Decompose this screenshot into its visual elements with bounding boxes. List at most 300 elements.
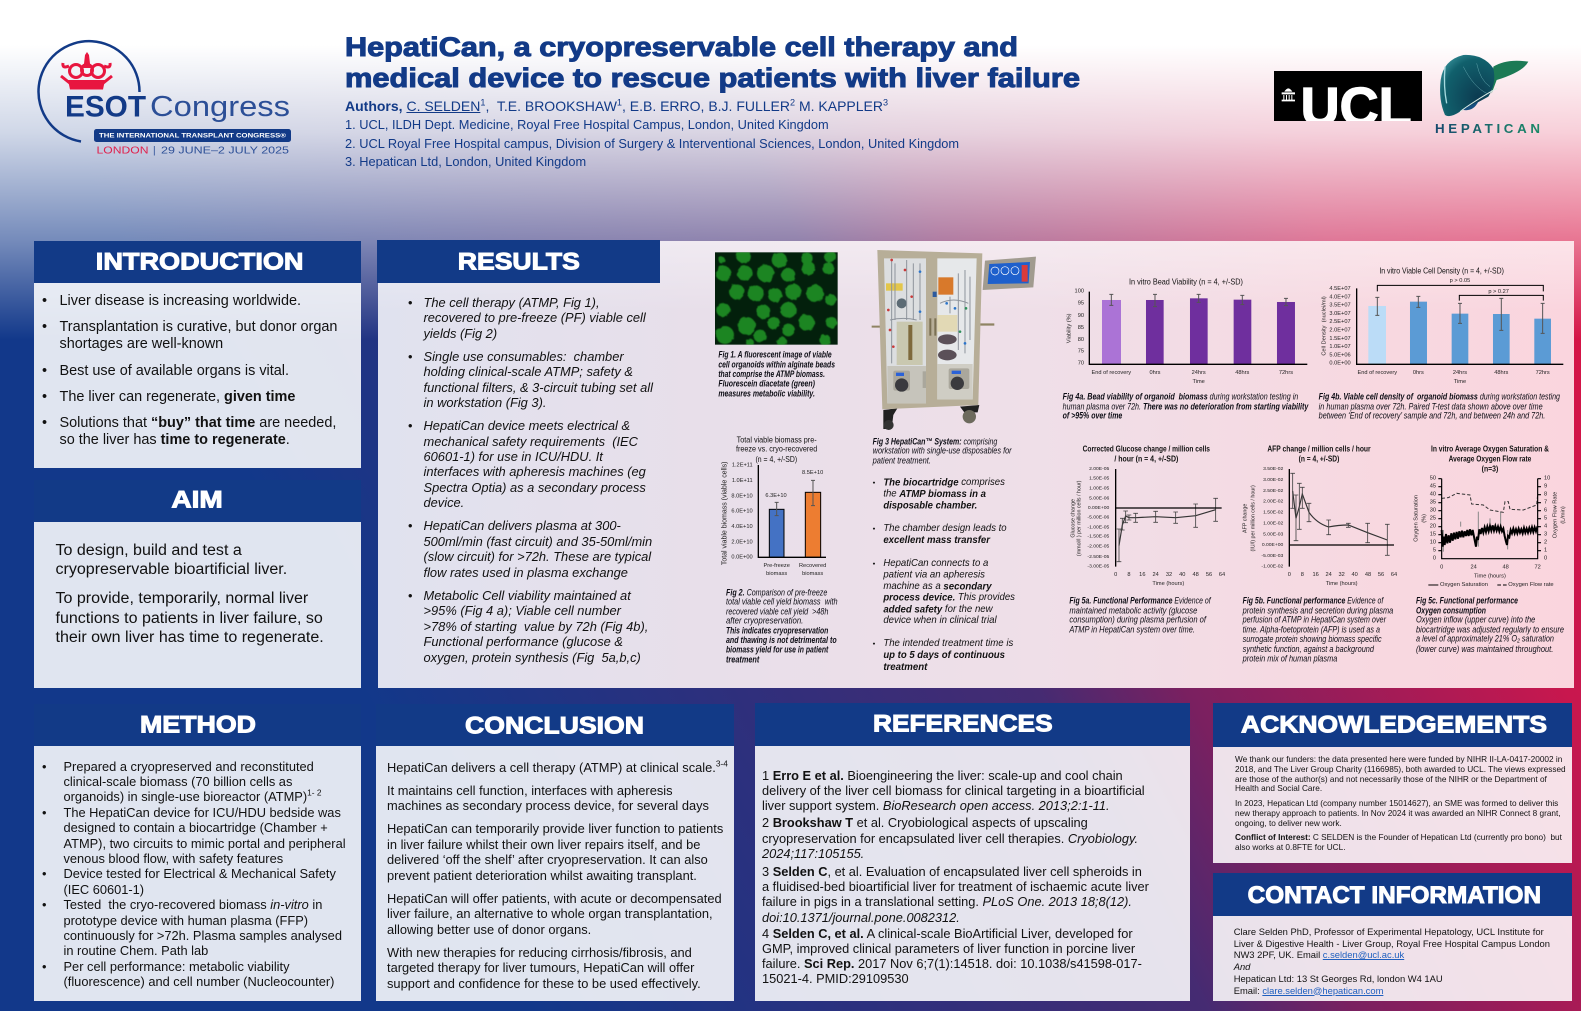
- figure 5c: oxygen saturation and flow chart: Time (hours): [1474, 574, 1506, 580]
- figure 4a caption: [1063, 392, 1309, 421]
- title: [345, 32, 1080, 93]
- acknowledgements text: 2018, and The Liver Group Charity (1166985), both awarded to UCL. The views expressed: [1235, 765, 1566, 774]
- figure 4a: bead viability bar chart: 0hrs: [1149, 370, 1161, 376]
- figure 5a caption: ATMP in HepatiCan system over time.: [1068, 624, 1195, 634]
- authors and affiliations: 1. UCL, ILDH Dept. Medicine, Royal Free Hospital Campus, London, United Kingdom: [345, 117, 829, 132]
- figure 5c: oxygen saturation and flow chart: 45: [1430, 484, 1436, 490]
- figure 5a: glucose line chart: [1070, 444, 1225, 587]
- figure 5a: glucose line chart: 0: [1114, 572, 1117, 578]
- figure 5a: glucose line chart: 16: [1139, 572, 1145, 578]
- figure 5c: oxygen saturation and flow chart: Oxygen Flow rate: [1508, 582, 1554, 588]
- figure 4a: bead viability bar chart: 24hrs: [1192, 370, 1206, 376]
- figure 5b: AFP line chart: 64: [1391, 572, 1397, 578]
- logo: ESOT Congress: ESOT: [65, 90, 146, 124]
- heading: conclusion: CONCLUSION: [465, 712, 644, 740]
- figure 5a: glucose line chart: -1.00E-05: [1087, 525, 1110, 531]
- figure 5c: oxygen saturation and flow chart: 4: [1544, 524, 1547, 530]
- figure 4a: bead viability bar chart: Time: [1192, 379, 1205, 385]
- figure 5a: glucose line chart: -5.00E-06: [1087, 515, 1110, 521]
- figure 5a: glucose line chart: 24: [1153, 572, 1159, 578]
- results bullet list: mechanical safety requirements (IEC: [424, 434, 638, 449]
- figure 5c: oxygen saturation and flow chart: 50: [1430, 476, 1436, 482]
- results bullet list: The cell therapy (ATMP, Fig 1),: [424, 295, 600, 310]
- figure 4b: viable cell density bar chart: End of recovery: [1358, 370, 1397, 376]
- figure 2 caption: treatment: [726, 654, 760, 664]
- figure 5c caption: Oxygen inflow (upper curve) into the: [1416, 615, 1535, 625]
- figure 3 key points: The biocartridge comprises: [883, 477, 1005, 488]
- acknowledgements text: ongoing, to deliver new work.: [1235, 819, 1342, 828]
- figure 4a: bead viability bar chart: 100: [1075, 289, 1084, 295]
- reference list: liver support system. BioResearch open access. 2013;2:1-11.: [762, 798, 1110, 813]
- figure 5a: glucose line chart: 48: [1193, 572, 1199, 578]
- contact text: Clare Selden PhD, Professor of Experimental Hepatology, UCL Institute for: [1234, 926, 1544, 937]
- panel: aim: [34, 480, 361, 688]
- figure 4b: viable cell density bar chart: 48hrs: [1494, 370, 1509, 376]
- reference list: 1 Erro E et al. Bioengineering the liver: scale-up and cool chain: [762, 768, 1123, 783]
- heading: contact information: [1213, 873, 1572, 916]
- figure 2 caption: [726, 588, 838, 664]
- figure 5a: glucose line chart: -2.00E-05: [1087, 544, 1110, 550]
- figure 5c: oxygen saturation and flow chart: 5: [1433, 548, 1436, 554]
- results bullet list: Spectra Optia) as a secondary process: [424, 480, 646, 495]
- figure 3 key points: [873, 477, 1015, 673]
- figure 2: total viable biomass bar chart: [721, 434, 826, 577]
- figure 3 key points: the ATMP biomass in a: [883, 488, 986, 499]
- results bullet list: Metabolic Cell viability maintained at: [424, 588, 631, 603]
- results bullet list: [408, 295, 654, 665]
- figure 2: total viable biomass bar chart: 8.0E+10: [731, 493, 753, 499]
- method bullet list: continuously for >72h. Plasma samples analysed: [64, 928, 342, 943]
- figure 5b: AFP line chart: 1.50E-02: [1263, 510, 1284, 516]
- acknowledgements text: Health and Social Care.: [1235, 784, 1322, 793]
- figure 5b: AFP line chart: AFP change: [1243, 504, 1249, 533]
- figure 4b: viable cell density bar chart: 24hrs: [1453, 370, 1467, 376]
- figure 3 key points: The chamber design leads to: [883, 523, 1007, 534]
- figure 3 key points: HepatiCan connects to a: [883, 558, 989, 569]
- figure 1 caption: that comprise the ATMP biomass.: [718, 369, 825, 379]
- method bullet list: organoids) in single-use bioreactor (ATMP)1- 2: [64, 788, 321, 804]
- figure 4a: bead viability bar chart: [1066, 277, 1307, 385]
- figure 5c: oxygen saturation and flow chart: 0: [1433, 556, 1436, 562]
- conclusion text: [387, 758, 728, 991]
- acknowledgements text: In 2023, Hepatican Ltd (company number 15014627), an SME was formed to deliver this: [1235, 799, 1558, 808]
- figure 4b: viable cell density bar chart: In vitro Viable Cell Density (n = 4, +/-SD): [1379, 266, 1504, 276]
- heading: results: RESULTS: [458, 248, 580, 276]
- figure 2: total viable biomass bar chart: Total viable biomass pre-: [737, 434, 817, 444]
- results bullet list: >78% of starting value by 72h (Fig 4b),: [424, 619, 648, 634]
- heading: references: [755, 703, 1190, 746]
- figure 3 key points: The intended treatment time is: [883, 638, 1013, 649]
- heading: results: [377, 240, 660, 283]
- results bullet list: recovered to pre-freeze (PF) viable cell: [424, 310, 646, 325]
- results bullet list: oxygen, protein synthesis (Fig 5a,b,c): [424, 650, 641, 665]
- introduction bullet list: Transplantation is curative, but donor organ: [60, 319, 337, 335]
- figure 5b caption: perfusion of ATMP in HepatiCan system over: [1242, 615, 1387, 625]
- figure 3 key points: treatment: [883, 662, 928, 673]
- heading: contact information: CONTACT INFORMATION: [1248, 882, 1541, 909]
- figure 5c caption: Oxygen consumption: [1416, 605, 1486, 615]
- title: medical device to rescue patients with liver failure: [345, 63, 1080, 93]
- figure 4b caption: [1319, 392, 1560, 421]
- figure 5a: glucose line chart: 1.00E-05: [1089, 486, 1110, 492]
- conclusion text: HepatiCan will offer patients, with acute or decompensated: [387, 891, 722, 906]
- figure 5a: glucose line chart: 1.50E-05: [1089, 476, 1110, 482]
- figure 1 caption: measures metabolic viability.: [718, 388, 815, 398]
- authors and affiliations: 2. UCL Royal Free Hospital campus, Division of Surgery & Interventional Sciences, London, United Kingdom: [345, 136, 959, 150]
- method bullet list: ATMP), two circuits to mimic portal and peripheral: [64, 836, 346, 851]
- figure 4b: viable cell density bar chart: p > 0.27: [1488, 289, 1509, 295]
- results bullet list: interfaces with apheresis machines (eg: [424, 464, 646, 479]
- acknowledgements text: also works at 0.8FTE for UCL.: [1235, 843, 1346, 852]
- figure 4a caption: human plasma over 72h. There was no deterioration from starting viability: [1063, 402, 1309, 412]
- figure 5a: glucose line chart: 64: [1219, 572, 1225, 578]
- figure 2: total viable biomass bar chart: 1.2E+11: [732, 463, 753, 469]
- figure 5c: oxygen saturation and flow chart: 7: [1544, 500, 1547, 506]
- figure 4a: bead viability bar chart: 85: [1078, 325, 1084, 331]
- figure 4b: viable cell density bar chart: 0.0E+00: [1329, 361, 1351, 367]
- figure 5c: oxygen saturation and flow chart: (%): [1421, 514, 1427, 523]
- aim text: cryopreservable bioartificial liver.: [56, 560, 287, 578]
- figure 5a caption: [1068, 595, 1212, 634]
- figure 5b caption: [1242, 595, 1393, 664]
- figure 1: fluorescent organoid image: [715, 249, 838, 347]
- figure 5c: oxygen saturation and flow chart: Oxygen Flow Rate: [1553, 492, 1559, 538]
- reference list: 3 Selden C, et al. Evaluation of encapsulated liver cell spheroids in: [762, 864, 1142, 879]
- conclusion text: With new therapies for reducing cirrhosis/fibrosis, and: [387, 945, 692, 960]
- conclusion text: prevent patient deterioration whilst awaiting transplant.: [387, 868, 697, 883]
- introduction bullet list: shortages are well-known: [60, 336, 223, 352]
- method bullet list: Per cell performance: metabolic viability: [64, 959, 290, 974]
- figure 5a: glucose line chart: 40: [1179, 572, 1185, 578]
- results bullet list: in workstation (Fig 3).: [424, 395, 546, 410]
- figure 5c: oxygen saturation and flow chart: 25: [1430, 516, 1436, 522]
- results bullet list: Single use consumables: chamber: [424, 349, 624, 364]
- figure 5b caption: protein mix of human plasma: [1242, 654, 1337, 664]
- figure 4a caption: Fig 4a. Bead viability of organoid biomass during workstation testing in: [1063, 392, 1298, 402]
- figure 5b: AFP line chart: 3.00E-02: [1263, 477, 1284, 483]
- figure 5a: glucose line chart: 8: [1127, 572, 1131, 578]
- reference list: failure. Sci Rep. 2017 Nov 6;7(1):14518. doi: 10.1038/s41598-017-: [762, 956, 1142, 971]
- figure 4b: viable cell density bar chart: [1321, 266, 1563, 385]
- conclusion text: It maintains cell function, interfaces with apheresis: [387, 783, 673, 798]
- figure 5a caption: Fig 5a. Functional Performance Evidence of: [1069, 595, 1212, 605]
- heading: acknowledgements: ACKNOWLEDGEMENTS: [1241, 712, 1547, 738]
- method bullet list: prototype device with human plasma (FFP): [64, 913, 308, 928]
- figure 5c: oxygen saturation and flow chart: Oxygen Saturation: [1440, 582, 1488, 588]
- figure 5b: AFP line chart: 24: [1326, 572, 1332, 578]
- figure 5c: oxygen saturation and flow chart: 3: [1544, 532, 1547, 538]
- contact text: [1233, 926, 1550, 996]
- figure 3 caption: [872, 437, 1012, 465]
- results bullet list: 60601-1) for use in ICU/HDU. It: [424, 449, 603, 464]
- figure 5b: AFP line chart: 1.00E-02: [1263, 521, 1284, 527]
- acknowledgements text: [1235, 755, 1566, 852]
- figure 5c: oxygen saturation and flow chart: 6: [1544, 508, 1547, 514]
- aim text: [56, 541, 324, 646]
- heading: aim: AIM: [171, 486, 223, 514]
- figure 5b: AFP line chart: 40: [1352, 572, 1358, 578]
- logo: UCL: [1274, 71, 1422, 121]
- figure 5b: AFP line chart: -1.00E-02: [1261, 564, 1284, 570]
- reference list: 2 Brookshaw T et al. Cryobiological aspects of upscaling: [762, 815, 1088, 830]
- figure 5c: oxygen saturation and flow chart: [1414, 444, 1566, 588]
- figure 2: total viable biomass bar chart: Pre-freeze: [763, 563, 790, 569]
- figure 4a: bead viability bar chart: 48hrs: [1235, 370, 1250, 376]
- figure 2: total viable biomass bar chart: 4.0E+10: [731, 524, 753, 530]
- figure 4a: bead viability bar chart: In vitro Bead Viability (n = 4, +/-SD): [1129, 277, 1243, 287]
- acknowledgements text: new therapy approach to patients. In Nov 2024 it was awarded an NIHR Connect 8 grant,: [1235, 809, 1561, 818]
- logo: ESOT Congress: |: [153, 146, 156, 156]
- results bullet list: HepatiCan device meets electrical &: [424, 418, 630, 433]
- results bullet list: Functional performance (glucose &: [424, 634, 623, 649]
- conclusion text: HepatiCan can temporarily provide liver function to patients: [387, 821, 723, 836]
- figure 2: total viable biomass bar chart: 2.0E+10: [731, 539, 753, 545]
- figure 5c: oxygen saturation and flow chart: 5: [1544, 516, 1547, 522]
- figure 5b caption: time. Alpha-foetoprotein (AFP) is used as a: [1243, 624, 1380, 634]
- figure 5a: glucose line chart: 56: [1206, 572, 1212, 578]
- authors and affiliations: 3. Hepatican Ltd, London, United Kingdom: [345, 154, 586, 169]
- figure 4a: bead viability bar chart: 72hrs: [1279, 370, 1293, 376]
- figure 5b: AFP line chart: (n = 4, +/-SD): [1299, 454, 1339, 464]
- figure 5a: glucose line chart: (mmol/l ) per million cells / hour): [1076, 480, 1082, 556]
- logo: Hepatican liver: [1435, 54, 1540, 136]
- logo: ESOT Congress: THE INTERNATIONAL TRANSPLANT CONGRESS®: [99, 131, 286, 139]
- figure 3 key points: up to 5 days of continuous: [883, 650, 1005, 661]
- panel: acknowledgements: [1213, 703, 1572, 863]
- figure 4b: viable cell density bar chart: 1.0E+07: [1329, 344, 1351, 350]
- results bullet list: device.: [424, 495, 464, 510]
- figure 4b: viable cell density bar chart: 1.5E+07: [1329, 336, 1351, 342]
- figure 2: total viable biomass bar chart: 8.5E+10: [802, 470, 823, 476]
- heading: aim: [34, 480, 361, 522]
- figure 5c: oxygen saturation and flow chart: 72: [1535, 565, 1541, 571]
- figure 4a: bead viability bar chart: 90: [1078, 313, 1084, 319]
- figure 5b: AFP line chart: 48: [1365, 572, 1371, 578]
- figure 4b: viable cell density bar chart: Cell Density (nuclei/ml): [1321, 296, 1327, 356]
- method bullet list: clinical-scale biomass (70 billion cells as: [64, 774, 292, 789]
- heading: introduction: [34, 241, 361, 283]
- figure 5c: oxygen saturation and flow chart: 10: [1544, 476, 1550, 482]
- method bullet list: (IEC 60601-1): [64, 882, 144, 897]
- reference list: cryopreservation for encapsulated liver cell therapies. Cryobiology.: [762, 831, 1138, 846]
- reference list: doi:10.1371/journal.pone.0082312.: [762, 910, 960, 925]
- results bullet list: yields (Fig 2): [424, 326, 497, 341]
- figure 5c: oxygen saturation and flow chart: 30: [1430, 508, 1436, 514]
- figure 5a: glucose line chart: Glucose change: [1070, 499, 1076, 538]
- figure 4b: viable cell density bar chart: Time: [1454, 379, 1466, 385]
- figure 5b caption: protein synthesis and secretion during plasma: [1242, 605, 1393, 615]
- reference list: 2024;117:105155.: [762, 846, 864, 861]
- figure 5b: AFP line chart: 8: [1301, 572, 1304, 578]
- figure 4b: viable cell density bar chart: 2.5E+07: [1329, 319, 1351, 325]
- conclusion text: HepatiCan delivers a cell therapy (ATMP) at clinical scale.3-4: [387, 758, 728, 775]
- contact text: Email: clare.selden@hepatican.com: [1234, 985, 1383, 996]
- figure 5c: oxygen saturation and flow chart: 24: [1471, 565, 1477, 571]
- figure 5a: glucose line chart: -2.50E-05: [1087, 554, 1110, 560]
- figure 5a: glucose line chart: Corrected Glucose change / million cells: [1083, 444, 1210, 454]
- acknowledgements text: are those of the author(s) and not necessarily those of the NIHR or the Department of: [1235, 775, 1547, 784]
- figure 2 caption: and thawing is not detrimental to: [726, 635, 837, 645]
- introduction bullet list: so the liver has time to regenerate.: [60, 432, 290, 448]
- figure 4b: viable cell density bar chart: 2.0E+07: [1329, 328, 1351, 334]
- heading: method: [34, 704, 361, 746]
- heading: references: REFERENCES: [873, 710, 1053, 738]
- figure 2: total viable biomass bar chart: 1.0E+11: [732, 478, 753, 484]
- figure 5c: oxygen saturation and flow chart: 15: [1430, 532, 1436, 538]
- figure 4b: viable cell density bar chart: 5.0E+06: [1329, 352, 1351, 358]
- figure 5c: oxygen saturation and flow chart: 10: [1430, 540, 1436, 546]
- introduction bullet list: Best use of available organs is vital.: [60, 363, 289, 379]
- figure 4a: bead viability bar chart: 75: [1078, 349, 1084, 355]
- reference list: 15021-4. PMID:29109530: [762, 971, 909, 986]
- figure 3 caption: patient treatment.: [872, 455, 931, 465]
- results bullet list: functional filters, & 3-circuit tubing set all: [424, 380, 653, 395]
- conclusion text: targeted therapy for liver tumours, HepatiCan will offer: [387, 960, 694, 975]
- logo: ESOT Congress: Congress: [150, 91, 290, 123]
- panel: contact information: [1213, 873, 1572, 1001]
- figure 4b: viable cell density bar chart: 0hrs: [1413, 370, 1424, 376]
- figure 5b: AFP line chart: 3.50E-02: [1263, 466, 1284, 472]
- figure 4b: viable cell density bar chart: 3.5E+07: [1329, 303, 1351, 309]
- panel: introduction: [34, 241, 361, 468]
- figure 2: total viable biomass bar chart: Recovered: [799, 563, 826, 569]
- conclusion text: in liver failure whilst their own liver repairs itself, and be: [387, 837, 700, 852]
- figure 5a: glucose line chart: / hour (n = 4, +/-SD): [1114, 454, 1178, 464]
- figure 5b: AFP line chart: 56: [1378, 572, 1384, 578]
- figure 5c: oxygen saturation and flow chart: 9: [1544, 484, 1547, 490]
- figure 1 caption: [718, 349, 835, 398]
- figure 5b: AFP line chart: 2.50E-02: [1263, 488, 1284, 494]
- results bullet list: >95% (Fig 4 a); Viable cell number: [424, 603, 621, 618]
- figure 2 caption: recovered viable cell yield >48h: [726, 606, 828, 616]
- conclusion text: delivered ‘off the shelf’ after cryopreservation. It can also: [387, 852, 708, 867]
- figure 5b caption: synthetic function, against a background: [1243, 644, 1375, 654]
- figure 5c caption: Fig 5c. Functional performance: [1416, 595, 1518, 605]
- figure 5c: oxygen saturation and flow chart: 35: [1430, 500, 1436, 506]
- figure 3 key points: disposable chamber.: [883, 500, 977, 511]
- figure 5c: oxygen saturation and flow chart: 2: [1544, 540, 1547, 546]
- aim text: To design, build and test a: [56, 541, 242, 559]
- heading: acknowledgements: [1213, 703, 1572, 747]
- heading: introduction: INTRODUCTION: [96, 248, 303, 276]
- figure 5a: glucose line chart: Time (hours): [1152, 581, 1184, 587]
- method bullet list: The HepatiCan device for ICU/HDU bedside was: [64, 805, 341, 820]
- figure 2 caption: This indicates cryopreservation: [726, 625, 829, 635]
- introduction bullet list: Liver disease is increasing worldwide.: [60, 293, 301, 309]
- figure 5c: oxygen saturation and flow chart: 48: [1503, 565, 1509, 571]
- figure 5b: AFP line chart: AFP change / million cells / hour: [1267, 444, 1371, 454]
- aim text: their own liver has time to regenerate.: [56, 628, 324, 646]
- reference list: 4 Selden C, et al. A clinical-scale BioArtificial Liver, developed for: [762, 926, 1133, 941]
- results bullet list: HepatiCan delivers plasma at 300-: [424, 518, 621, 533]
- figure 3 key points: patient via an apheresis: [882, 569, 985, 580]
- figure 2 caption: Fig 2. Comparison of pre-freeze: [726, 588, 827, 598]
- figure 2: total viable biomass bar chart: 6.0E+10: [731, 509, 753, 515]
- contact text: And: [1234, 961, 1250, 972]
- figure 4a: bead viability bar chart: Viability (%): [1066, 313, 1072, 343]
- method bullet list: designed to contain a biocartridge (Chamber +: [64, 820, 328, 835]
- figure 5c: oxygen saturation and flow chart: 1: [1544, 548, 1547, 554]
- panel: method: [34, 712, 361, 1001]
- figure 5b: AFP line chart: 5.00E-03: [1263, 531, 1284, 537]
- contact text: Liver & Digestive Health - Liver Group, Royal Free Hospital Campus London: [1234, 938, 1550, 949]
- figure 1 caption: Fluorescein diacetate (green): [718, 379, 815, 389]
- figure 3: HepatiCan workstation: [872, 250, 1036, 430]
- figure 5b: AFP line chart: [1243, 444, 1397, 587]
- figure 5c: oxygen saturation and flow chart: 8: [1544, 492, 1547, 498]
- figure 3 key points: device when in clinical trial: [883, 615, 997, 626]
- figure 2: total viable biomass bar chart: 6.3E+10: [765, 493, 787, 499]
- logo: Hepatican liver: HEPATICAN: [1435, 121, 1540, 136]
- figure 5a caption: consumption) during plasma perfusion of: [1069, 615, 1207, 625]
- figure 5c: oxygen saturation and flow chart: 0: [1440, 565, 1443, 571]
- conclusion text: liver failure, an alternative to whole organ transplantation,: [387, 906, 713, 921]
- introduction bullet list: The liver can regenerate, given time: [60, 389, 295, 405]
- figure 3 caption: workstation with single-use disposables for: [873, 446, 1012, 456]
- figure 5c caption: [1416, 595, 1564, 654]
- reference list: a fluidised-bed bioartificial liver for treatment of ischaemic acute liver: [762, 879, 1149, 894]
- figure 4a caption: of >95% over time: [1063, 411, 1122, 421]
- method bullet list: Tested the cryo-recovered biomass in-vitro in: [64, 897, 322, 912]
- acknowledgements text: We thank our funders: the data presented here were funded by NIHR II-LA-0417-20002 in: [1235, 755, 1562, 764]
- reference list: [762, 768, 1149, 986]
- reference list: delivery of the liver cell biomass for clinical targeting in a bioartificial: [762, 783, 1145, 798]
- results figures: [715, 250, 1566, 673]
- panel: conclusion: [376, 704, 734, 1001]
- heading: method: METHOD: [140, 712, 256, 738]
- figure 2: total viable biomass bar chart: (n = 4, +/-SD): [755, 454, 797, 464]
- figure 4a: bead viability bar chart: End of recovery: [1092, 370, 1131, 376]
- aim text: functions to patients in liver failure, so: [56, 609, 323, 627]
- figure 5b caption: Fig 5b. Functional performance Evidence of: [1243, 595, 1384, 605]
- figure 5a: glucose line chart: -3.00E-05: [1087, 564, 1110, 570]
- figure 2 caption: total viable cell yield biomass with: [726, 597, 838, 607]
- figure 5b: AFP line chart: 2.00E-02: [1263, 499, 1284, 505]
- conclusion text: machines as secondary process device, for several days: [387, 798, 709, 813]
- figure 5b: AFP line chart: 0.00E+00: [1262, 542, 1284, 548]
- figure 4b: viable cell density bar chart: 3.0E+07: [1329, 311, 1351, 317]
- contact text: NW3 2PF, UK. Email c.selden@ucl.ac.uk: [1234, 949, 1404, 960]
- figure 1 caption: Fig 1. A fluorescent image of viable: [718, 349, 832, 359]
- results bullet list: flow rates used in plasma exchange: [424, 565, 628, 580]
- figure 3 key points: excellent mass transfer: [883, 535, 991, 546]
- reference list: failure in pigs in a translational setting. PLoS One. 2013 18;8(12).: [762, 894, 1132, 909]
- results bullet list: (slow circuit) for >72h. These are typical: [424, 549, 651, 564]
- heading: conclusion: [376, 704, 734, 746]
- figure 2: total viable biomass bar chart: 0.0E+00: [731, 554, 753, 560]
- figure 5c: oxygen saturation and flow chart: (L/min): [1560, 506, 1566, 524]
- figure 2 caption: biomass yield for use in patient: [726, 645, 829, 655]
- panel: references: [755, 703, 1190, 1001]
- title: HepatiCan, a cryopreservable cell therapy and: [345, 32, 1018, 62]
- figure 5b: AFP line chart: 16: [1313, 572, 1319, 578]
- figure 2: total viable biomass bar chart: biomass: [802, 571, 823, 577]
- method bullet list: Device tested for Electrical & Mechanical Safety: [64, 866, 336, 881]
- logo: ESOT Congress: 29 JUNE–2 JULY 2025: [161, 146, 290, 156]
- acknowledgements text: Conflict of Interest: C SELDEN is the Founder of Hepatican Ltd (currently pro bono) but: [1235, 833, 1562, 842]
- reference list: GMP, improved clinical parameters of liver function in porcine liver: [762, 941, 1135, 956]
- figure 3 key points: process device. This provides: [882, 592, 1015, 603]
- figure 3 caption: Fig 3 HepatiCan™ System: comprising: [873, 437, 997, 447]
- conclusion text: support and confidence for these to be used effectively.: [387, 976, 701, 991]
- conclusion text: allowing better use of donor organs.: [387, 922, 591, 937]
- figure 5c: oxygen saturation and flow chart: (n=3): [1482, 463, 1498, 473]
- results bullet list: 500ml/min (fast circuit) and 35-50ml/min: [424, 534, 652, 549]
- figure 5a: glucose line chart: -1.50E-05: [1087, 534, 1110, 540]
- figure 5a caption: maintained metabolic activity (glucose: [1069, 605, 1197, 615]
- figure 3 key points: machine as a secondary: [883, 581, 993, 592]
- figure 5b: AFP line chart: -5.00E-03: [1261, 553, 1284, 559]
